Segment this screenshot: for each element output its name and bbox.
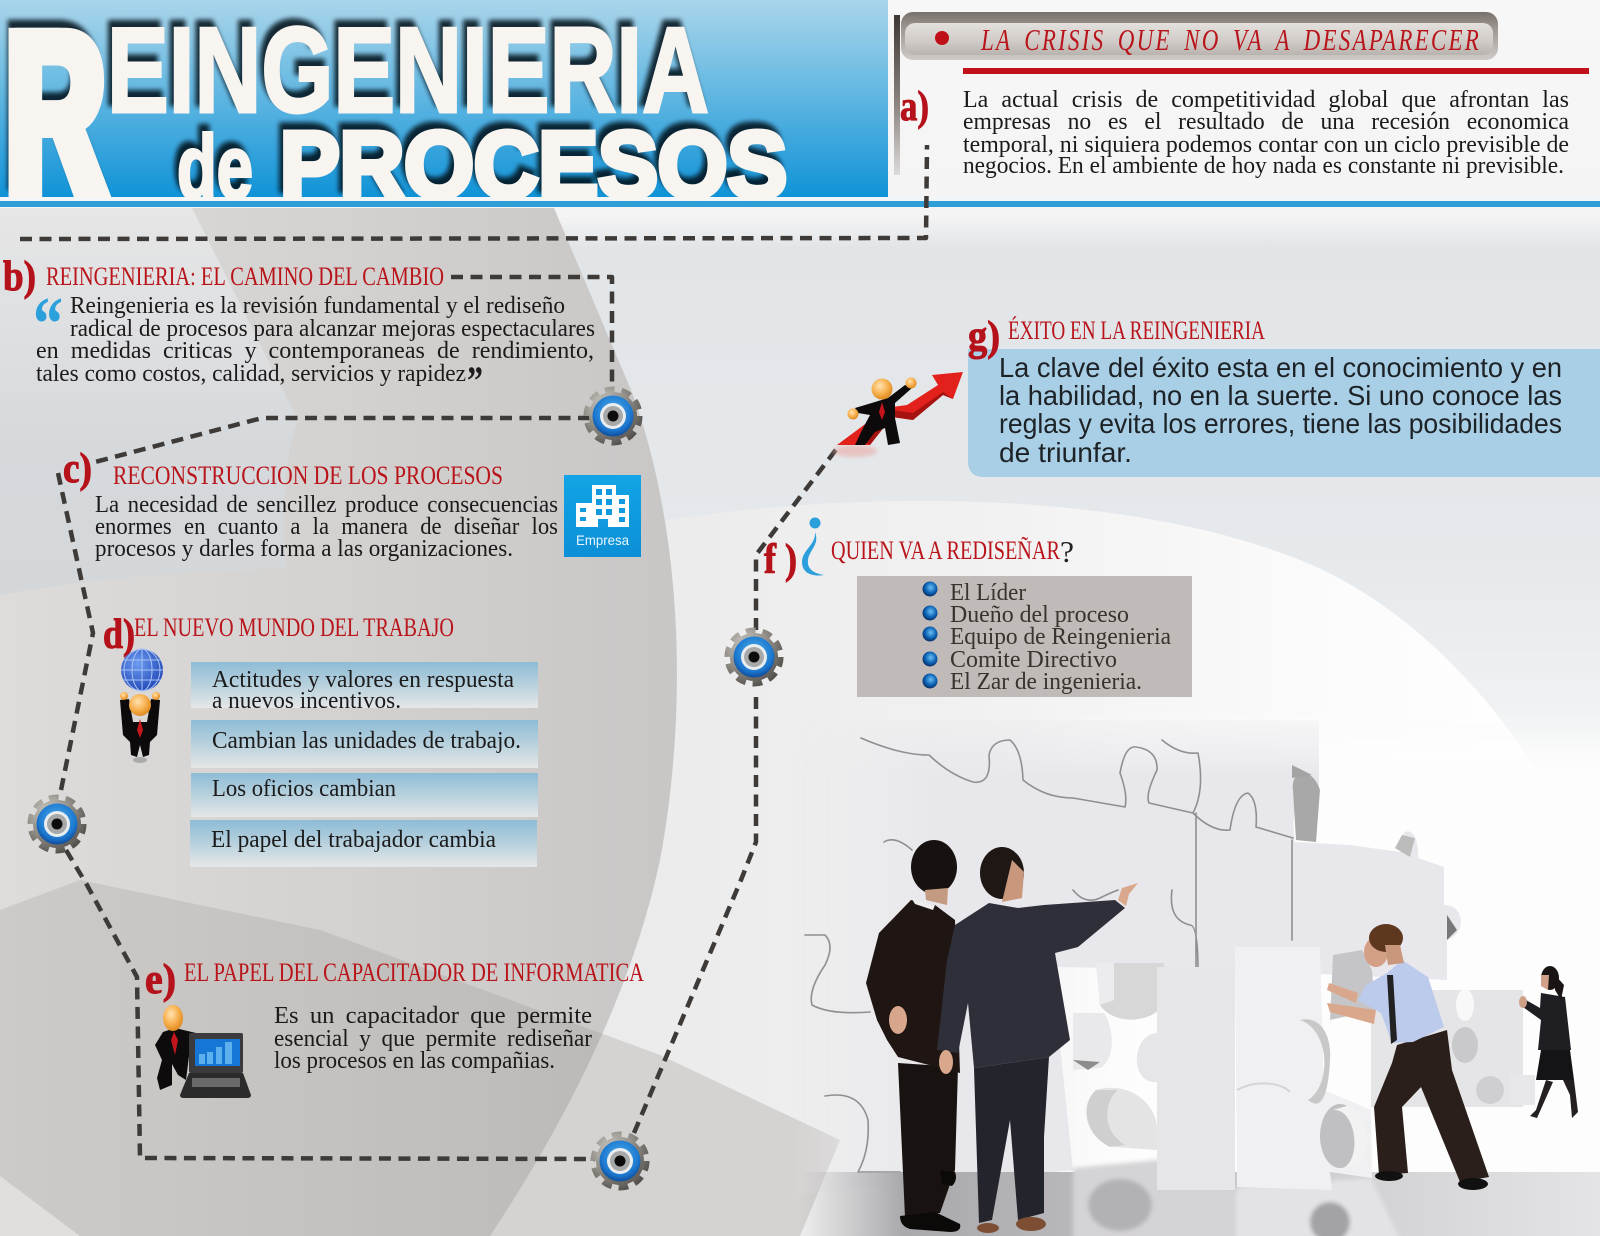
list bullets (922, 582, 938, 688)
callout text: reglas y evita los errores, tiene las posibilidades (999, 408, 1562, 439)
title: Reingenieria de Procesos: PROCESOS (280, 112, 787, 217)
banner heading (901, 12, 1498, 60)
panel e: el papel del capacitador (145, 957, 644, 1098)
callout text: La clave del éxito esta en el conocimiento y en (999, 352, 1562, 383)
icon: inverted question mark (802, 518, 824, 575)
box: unidades de trabajo: Cambian las unidades de trabajo. (212, 728, 521, 754)
closing quote mark: ” (467, 358, 483, 403)
box: papel del trabajador (190, 820, 537, 867)
heading g: ÉXITO EN LA REINGENIERIA (1008, 316, 1265, 345)
dashed connector path (20, 145, 927, 1159)
letter a: a) (900, 84, 929, 130)
puzzle wall (834, 732, 1461, 1172)
box: oficios (191, 773, 538, 817)
gear node: left (31, 798, 83, 850)
box: unidades de trabajo (191, 720, 538, 768)
body text c: La necesidad de sencillez produce consecuencias (95, 492, 558, 518)
list box: El Líder (950, 580, 1026, 606)
list box: El Zar de ingenieria. (950, 669, 1142, 695)
gear node: bottom (594, 1135, 646, 1187)
panel c: reconstruccion de los procesos (63, 446, 641, 562)
panel g: exito en la reingenieria (833, 314, 1600, 477)
callout text (999, 352, 1562, 468)
body text c: procesos y darles forma a las organizaciones. (95, 536, 513, 562)
body text a: negocios. En el ambiente de hoy nada es constante ni previsible. (963, 153, 1564, 179)
box: actitudes y valores (191, 662, 538, 714)
quote text: radical de procesos para alcanzar mejoras espectaculares (70, 316, 595, 342)
body text c (95, 492, 558, 562)
quote text (36, 293, 595, 387)
list box: Equipo de Reingenieria (950, 624, 1171, 650)
front puzzle piece (1235, 947, 1375, 1190)
puzzle knob shading (1292, 765, 1457, 940)
quote text: tales como costos, calidad, servicios y rapidez (36, 361, 466, 387)
background puzzle pieces (1073, 963, 1535, 1190)
opening quote mark: “ (33, 282, 63, 366)
list box (857, 576, 1192, 697)
photo: business team assembling puzzle (790, 700, 1600, 1236)
title: Reingenieria de Procesos: de (177, 118, 253, 218)
gear node: right (728, 631, 780, 683)
floor with reflections (800, 1160, 1600, 1236)
icon: man on red rising arrow (833, 372, 963, 457)
heading e: EL PAPEL DEL CAPACITADOR DE INFORMATICA (184, 958, 644, 987)
box: actitudes y valores: a nuevos incentivos. (212, 688, 401, 714)
box: actitudes y valores: Actitudes y valores en respuesta (212, 667, 514, 693)
title: Reingenieria de Procesos: de (173, 111, 249, 211)
title: Reingenieria de Procesos (2, 0, 787, 241)
panel d: el nuevo mundo del trabajo (103, 612, 538, 867)
panel f: quien va a redisenar (764, 518, 1192, 697)
question mark: ? (1060, 534, 1074, 569)
body text a: temporal, ni siquiera podemos contar con un ciclo previsible de (963, 132, 1569, 158)
blue callout box (968, 349, 1600, 477)
letter d: d) (103, 612, 135, 658)
man pushing puzzle piece (1327, 924, 1489, 1190)
title: Reingenieria de Procesos: EINGENIERIA (107, 2, 709, 138)
heading f: QUIEN VA A REDISEÑAR (831, 536, 1061, 565)
puzzle seams (805, 738, 1293, 1172)
icon: empresa building (564, 475, 641, 557)
heading d: EL NUEVO MUNDO DEL TRABAJO (134, 613, 454, 642)
quote text: en medidas criticas y contemporaneas de rendimiento, (36, 338, 594, 364)
icon: person holding globe (120, 649, 163, 763)
body text c: enormes en cuanto a la manera de diseñar los (95, 514, 558, 540)
quote text: Reingenieria es la revisión fundamental y el rediseño (70, 293, 565, 319)
body text a (963, 87, 1569, 179)
man in dark brown suit (866, 840, 960, 1232)
heading c: RECONSTRUCCION DE LOS PROCESOS (113, 461, 503, 490)
list box: Dueño del proceso (950, 602, 1129, 628)
body text a: empresas no es el resultado de una recesión economica (963, 109, 1569, 135)
icon: empresa building: Empresa (576, 532, 629, 548)
header banner with blue gradient (0, 0, 1600, 207)
gear node: top (587, 390, 639, 442)
woman pushing puzzle piece (1519, 966, 1578, 1118)
red rule (963, 68, 1589, 74)
vertical accent bar (894, 15, 900, 175)
box: oficios: Los oficios cambian (212, 776, 396, 802)
list box: Comite Directivo (950, 647, 1117, 673)
panel b: el camino del cambio (3, 254, 595, 403)
man pointing in grey suit (937, 847, 1138, 1233)
body text e: los procesos en las compañias. (274, 1048, 555, 1074)
body text e (274, 1003, 592, 1074)
box: papel del trabajador: El papel del trabajador cambia (211, 827, 496, 853)
icon: person with laptop (155, 1005, 251, 1098)
body text a: La actual crisis de competitividad global que afrontan las (963, 87, 1569, 113)
body text e: Es un capacitador que permite (274, 1003, 592, 1029)
title: Reingenieria de Procesos: PROCESOS (276, 105, 783, 210)
letter f: f ) (764, 537, 797, 583)
callout text: de triunfar. (999, 437, 1132, 468)
white photo backdrop (1527, 755, 1600, 898)
heading b: REINGENIERIA: EL CAMINO DEL CAMBIO (46, 262, 444, 291)
panel a: la crisis (894, 12, 1589, 179)
letter e: e) (145, 957, 176, 1003)
callout text: la habilidad, no en la suerte. Si uno conoce las (999, 380, 1562, 411)
letter g: g) (968, 314, 1000, 360)
letter b: b) (3, 254, 36, 300)
letter c: c) (63, 446, 92, 492)
body text e: esencial y que permite rediseñar (274, 1026, 592, 1052)
